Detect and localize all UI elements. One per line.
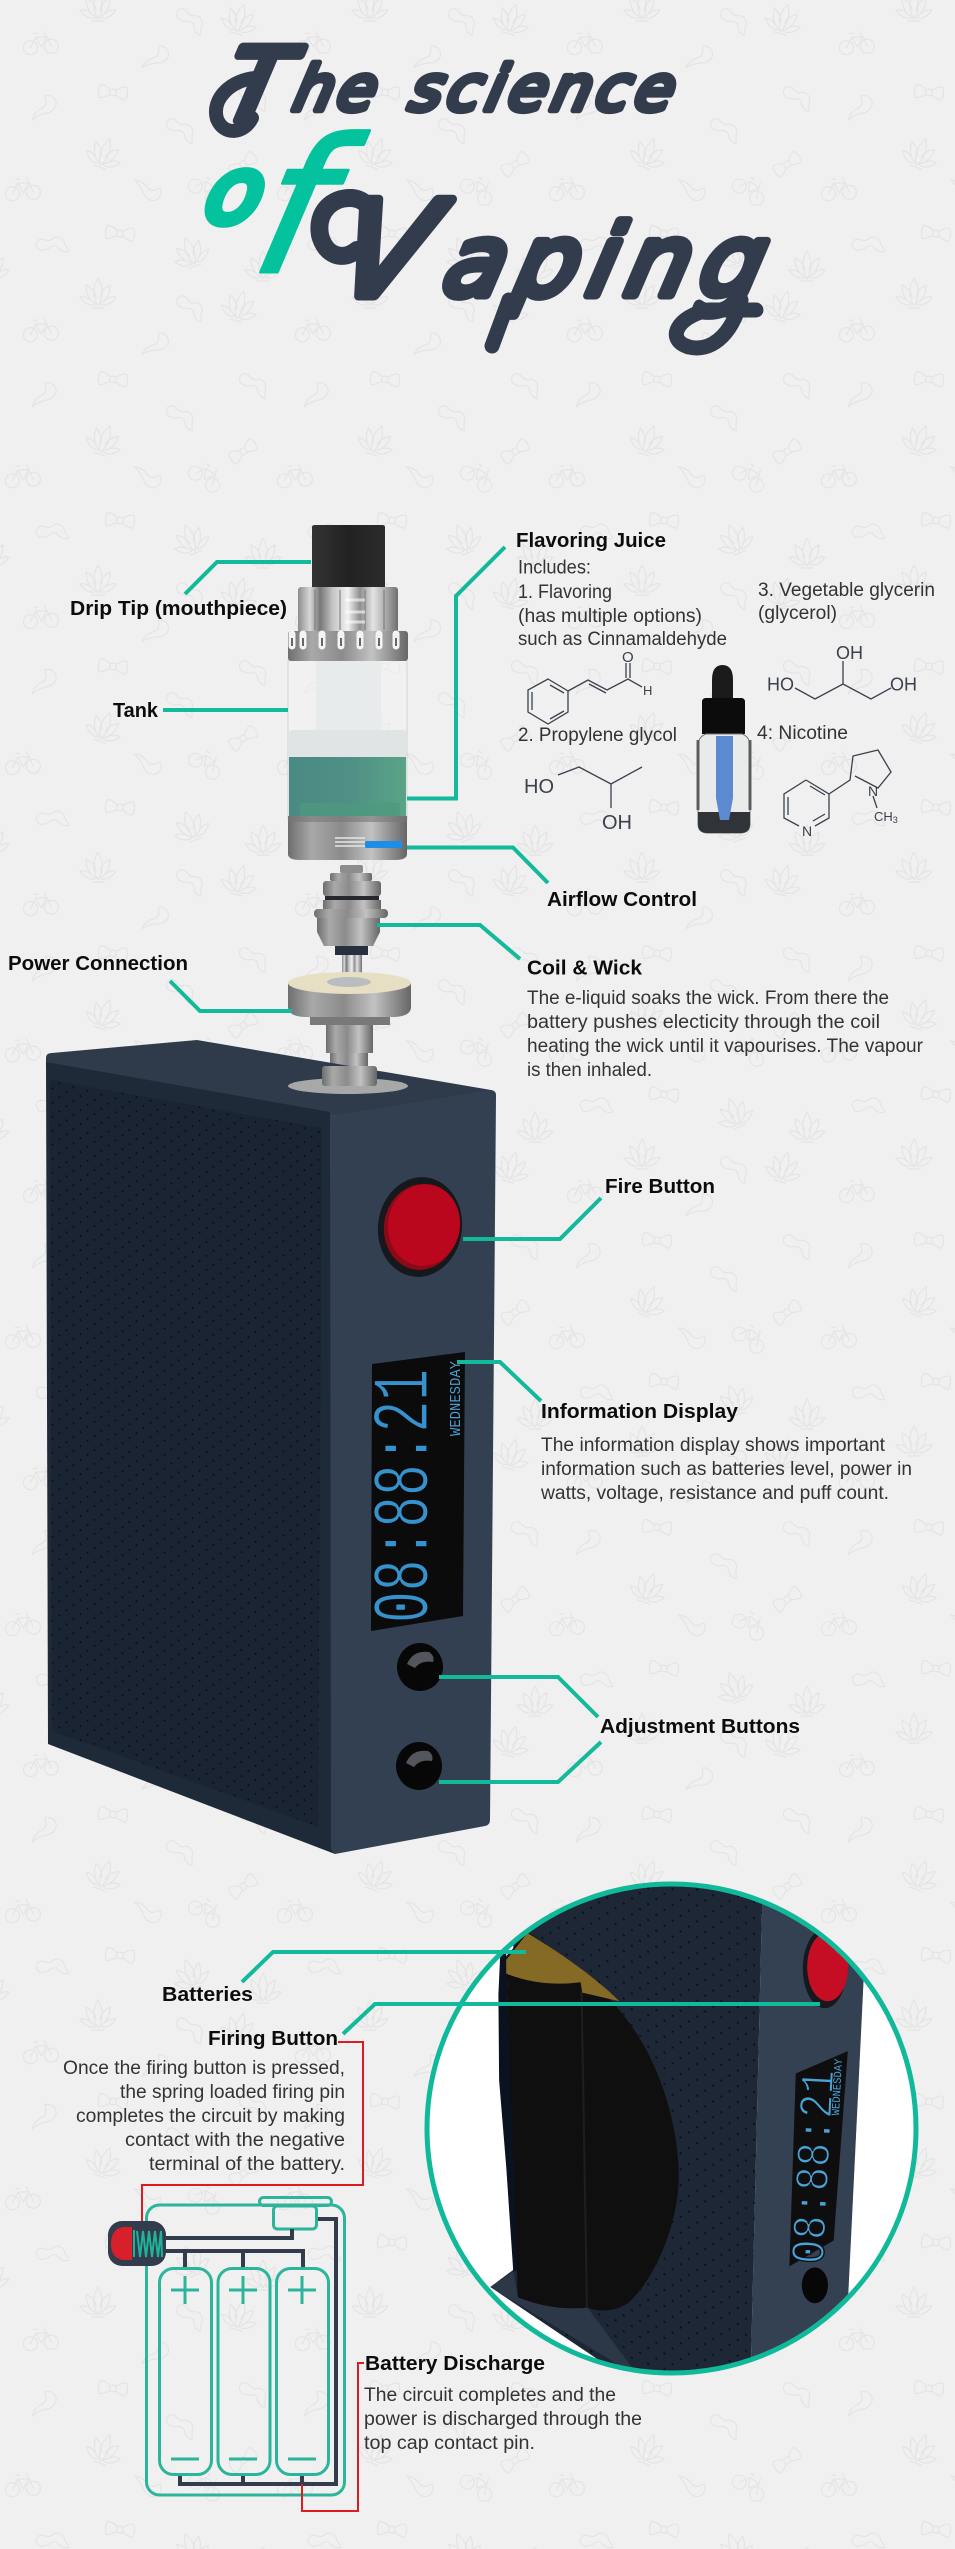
description: The e-liquid soaks the wick. From there the [527,988,889,1009]
ingredients text: 3. Vegetable glycerin [758,580,935,601]
power connection [288,972,411,1066]
ingredients text [518,558,935,746]
cutaway device [490,1874,874,2383]
battery divider [582,1991,587,2308]
switch box [274,2206,316,2229]
description: watts, voltage, resistance and puff count. [540,1483,889,1504]
description: completes the circuit by making [76,2106,345,2127]
heading line: The science [214,27,694,144]
information display: 08:88:21 [361,1369,452,1623]
heading word: of: f [238,100,377,316]
dotted front face [490,1874,763,2383]
side face [751,1904,864,2357]
switch cap [260,2198,332,2206]
line: batteries [242,1952,526,1982]
red leader: firing pin [142,2042,363,2221]
top ring [288,631,408,661]
top face [46,1040,496,1116]
ingredients text: such as Cinnamaldehyde [518,629,727,650]
molecule: propylene glycol [524,767,642,834]
heading: Firing Button [208,2027,338,2050]
label: power connection: Power Connection [8,952,188,975]
heading: Flavoring Juice [516,529,666,552]
chrome collar [298,587,398,633]
top connector plate [288,1066,408,1094]
panel: information display [540,1400,912,1504]
description: the spring loaded firing pin [120,2082,345,2103]
molecule: vegetable glycerin: HO [767,674,794,694]
adjustment button lower [396,1742,442,1790]
label: fire button: Fire Button [605,1175,715,1198]
label: drip tip: Drip Tip (mouthpiece) [70,597,287,620]
molecule: nicotine: 3 [893,815,898,825]
dotted panel [50,1080,322,1827]
description [364,2385,642,2454]
front face [46,1062,335,1854]
circuit diagram [108,2042,364,2511]
battery gold tops [506,1933,619,2001]
line: power [170,981,292,1011]
heading: Information Display [541,1400,739,1423]
heading line: The science: science [404,53,688,125]
swash tails: p and g descenders [492,300,756,348]
heading: Coil & Wick [527,956,643,980]
heading word: of: o [197,138,276,244]
fire button [371,1172,469,1282]
molecule: propylene glycol: HO [524,776,554,798]
title [180,27,796,348]
molecule: vegetable glycerin [767,643,917,699]
firing pin [108,2221,166,2266]
description: is then inhaled. [527,1060,652,1081]
label: airflow control: Airflow Control [547,888,697,911]
heading word: Vaping [319,176,796,348]
molecule: cinnamaldehyde: H [643,683,652,698]
red button [803,1929,848,2008]
ingredients text: 1. Flavoring [518,582,612,603]
molecule: nicotine: N [802,823,812,839]
information display [361,1352,465,1631]
glass tank [288,660,407,820]
coil and wick [314,865,388,975]
panel: coil and wick [527,956,924,1081]
description [527,988,924,1081]
ingredients text: (glycerol) [758,603,837,624]
description: The information display shows important [541,1435,886,1456]
red leader: discharge [302,2363,364,2511]
dark wires [166,2219,336,2484]
molecule: nicotine [784,750,898,839]
line: drip tip [185,562,311,594]
molecule: nicotine: CH [874,809,893,824]
description [540,1435,912,1504]
outer casing [146,2205,344,2495]
description: top cap contact pin. [364,2433,535,2454]
small button [802,2267,828,2303]
base plate [490,2272,634,2370]
description: battery pushes electicity through the coil [527,1012,880,1033]
line: coil [377,925,520,959]
batteries [506,1932,679,2310]
description: contact with the negative [125,2130,345,2151]
label: batteries: Batteries [162,1983,253,2006]
panel: firing button [63,2027,345,2175]
molecule: vegetable glycerin: OH [890,674,917,694]
line: information display [457,1362,541,1401]
description: The circuit completes and the [364,2385,616,2406]
callout lines [163,547,601,1782]
molecule: cinnamaldehyde [528,649,652,724]
e-liquid dropper bottle [698,665,750,833]
description: power is discharged through the [364,2409,642,2430]
molecule: propylene glycol: OH [602,812,632,834]
molecule: cinnamaldehyde: O [622,649,634,666]
label: tank: Tank [113,699,159,722]
line: airflow [407,848,548,883]
airflow base [288,816,407,860]
battery cells [160,2268,328,2474]
line: firing button [343,2004,820,2034]
line: fire button [463,1198,601,1239]
side face [330,1090,496,1854]
molecule: nicotine: N [868,783,878,799]
label: adjustment buttons: Adjustment Buttons [600,1715,800,1738]
heading word: Vaping: V [326,176,457,327]
line: flavoring [407,547,505,798]
atomizer tank assembly [288,525,411,1066]
display: WEDNESDAY [831,2058,846,2116]
lens ring [427,1884,916,2373]
display: 08:88:21 [785,2068,849,2265]
ingredients text: 2. Propylene glycol [518,725,677,746]
molecule: vegetable glycerin: OH [836,643,863,663]
description: Once the firing button is pressed, [63,2058,345,2079]
heading line: The science: T [214,27,309,144]
information display: WEDNESDAY [448,1361,465,1436]
panel: battery discharge [364,2352,642,2454]
magnified cutaway circle [427,1874,916,2383]
panel: flavoring juice [516,529,935,839]
description: terminal of the battery. [149,2154,345,2175]
heading line: The science: he [288,53,390,125]
description: heating the wick until it vapourises. The vapour [527,1036,924,1057]
drip tip [312,525,385,588]
line: adjustment lower [439,1742,601,1782]
lens background [428,1884,916,2372]
heading: Battery Discharge [365,2352,545,2375]
adjustment button upper [397,1643,443,1691]
device body [46,1040,496,1854]
heading word: Vaping: aping [435,205,790,319]
line: adjustment upper [439,1677,598,1717]
battery casing edge [498,1953,518,2272]
description: information such as batteries level, power in [541,1459,912,1480]
ingredients text: Includes: [518,558,591,578]
description [63,2058,345,2175]
ingredients text: 4: Nicotine [757,723,848,744]
ingredients text: (has multiple options) [518,606,702,627]
line: tank [163,708,288,712]
